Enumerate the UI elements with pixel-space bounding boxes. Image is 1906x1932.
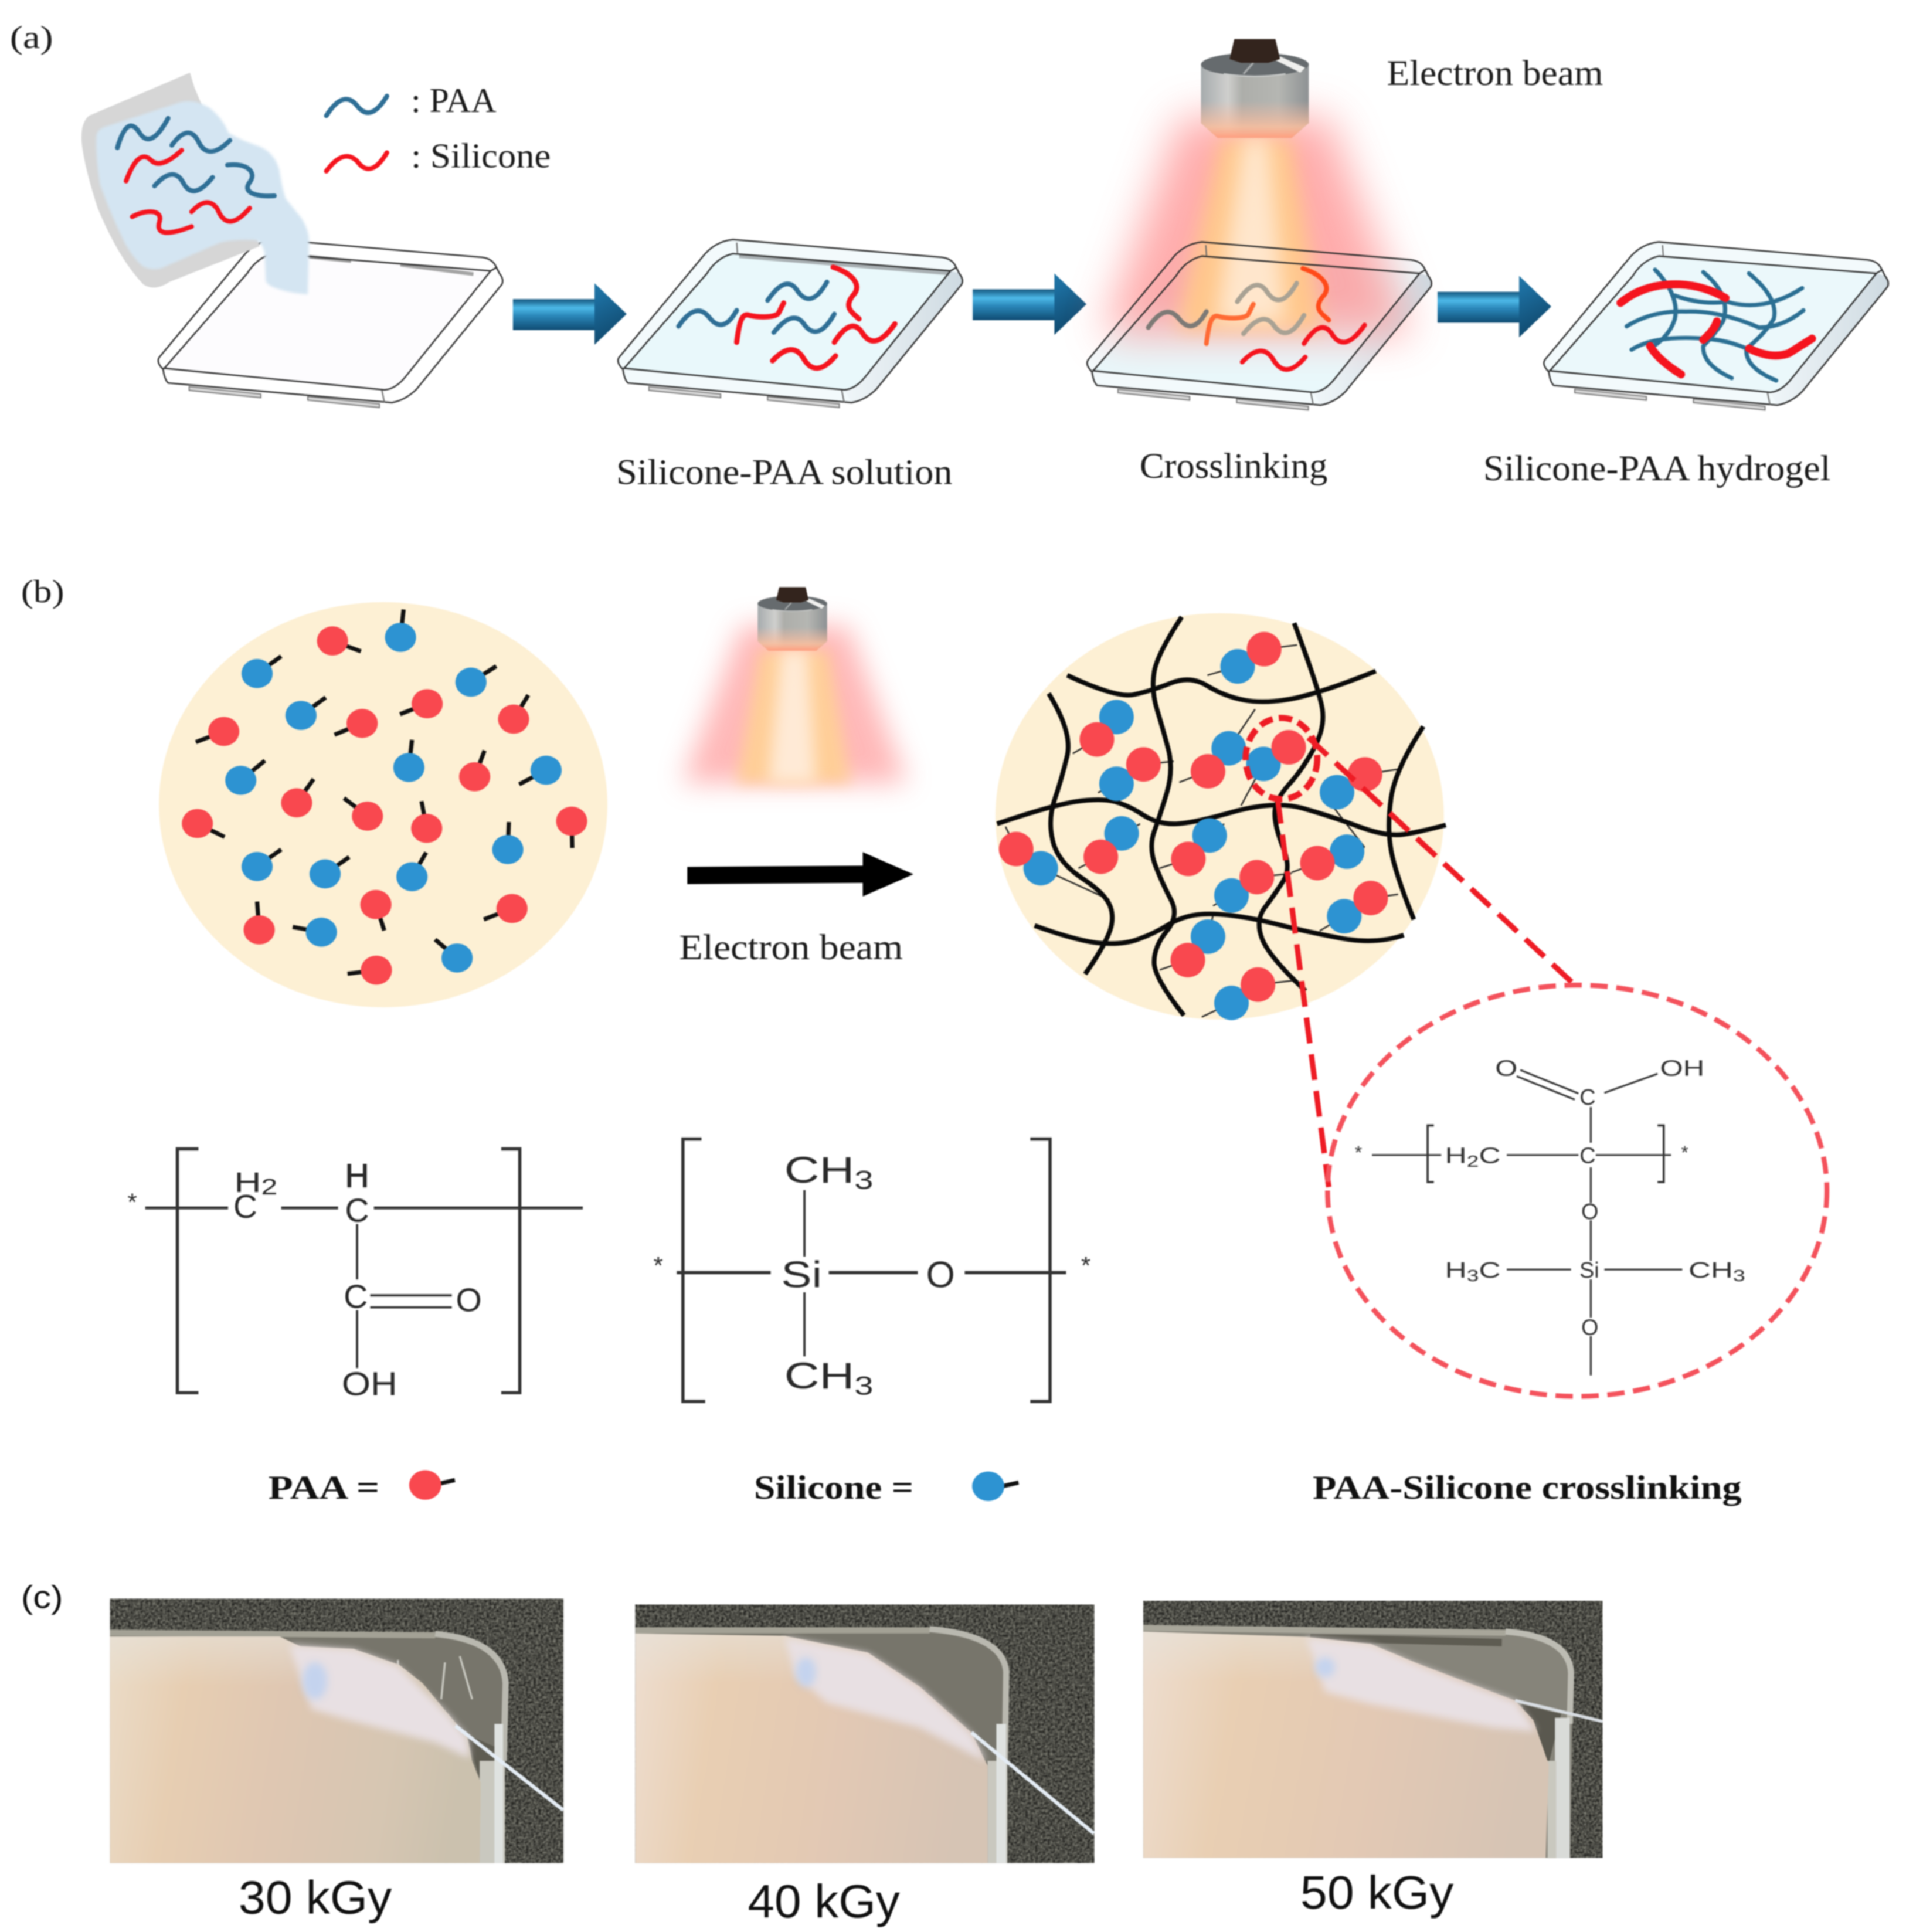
chemical structure: PAA-silicone crosslink: C [1479,1258,1500,1283]
legend: PAA and silicone chains: : Silicone [411,137,551,175]
chemical structure: silicone repeat unit [653,1139,1090,1401]
chemical structure: PAA-silicone crosslink: 2 [1467,1152,1479,1170]
callout: dashed zoom from network to crosslink structure [1246,718,1827,1396]
icon: electron beam source [1201,39,1309,138]
label: 50 kGy: 50 kGy [1300,1866,1453,1919]
panel (b): crosslinking mechanism [21,573,1827,1506]
arrow: black reaction arrow [687,852,913,897]
legend: PAA symbol [269,1469,455,1506]
arrow: solution to crosslinking [973,273,1086,335]
chemical structure: PAA-silicone crosslink: O [1495,1056,1517,1081]
dish with silicone-PAA hydrogel network [1544,242,1888,410]
panel label (b): (b) [21,573,64,609]
chemical structure: PAA-silicone crosslink: H [1445,1144,1461,1168]
arrow: crosslinking to hydrogel [1438,276,1551,337]
chemical structure: PAA-silicone crosslink: O [1581,1200,1598,1224]
crosslinking dish under electron beam [1087,117,1432,410]
label: 30 kGy: 30 kGy [239,1872,392,1923]
legend: silicone symbol: Silicone = [754,1469,913,1506]
legend: PAA and silicone chains [327,82,551,175]
legend: silicone symbol [754,1469,1018,1506]
chemical structure: silicone repeat unit: 3 [854,1166,874,1195]
pouch pouring solution [81,73,309,294]
chemical structure: PAA-silicone crosslink: 3 [1467,1267,1479,1285]
chemical structure: PAA-silicone crosslink: CH [1688,1258,1721,1283]
label: 40 kGy: 40 kGy [748,1875,900,1927]
chemical structure: PAA-silicone crosslink: H [1445,1258,1461,1283]
chemical structure: PAA repeat unit: C [345,1192,369,1229]
chemical structure: PAA repeat unit: C [344,1278,368,1315]
chemical structure: PAA repeat unit [127,1149,583,1403]
chemical structure: silicone repeat unit: 3 [854,1371,874,1400]
photo: 40 kGy hydrogel [636,1604,1094,1863]
chemical structure: PAA-silicone crosslink: * [1355,1142,1362,1163]
arrow: pour to solution [513,283,627,345]
empty dish [158,239,502,408]
caption: Silicone-PAA hydrogel: Silicone-PAA hydrogel [1483,449,1830,488]
chemical structure: silicone repeat unit: * [653,1252,663,1279]
photo: 30 kGy hydrogel [110,1599,563,1863]
chemical structure: PAA-silicone crosslink: Si [1579,1258,1599,1283]
chemical structure: PAA repeat unit: 2 [261,1175,277,1200]
chemical structure: silicone repeat unit: CH [784,1356,838,1397]
chemical structure: PAA repeat unit: C [233,1189,257,1225]
chemical structure: PAA repeat unit: OH [342,1366,397,1403]
chemical structure: PAA-silicone crosslink: C [1579,1144,1596,1168]
chemical structure: PAA repeat unit: O [456,1282,482,1319]
photo: 50 kGy hydrogel [1143,1601,1602,1858]
circle: dispersed PAA and silicone before irradiation [159,602,607,1007]
chemical structure: PAA-silicone crosslink: C [1479,1144,1500,1168]
panel (a): preparation process [10,19,1888,492]
legend: PAA symbol: PAA = [269,1469,379,1506]
legend: PAA and silicone chains: : PAA [411,82,497,120]
caption: Silicone-PAA solution: Silicone-PAA solution [616,453,952,492]
small electron beam source with glow [682,587,907,783]
chemical structure: PAA repeat unit: H [235,1167,255,1198]
panel (c): hydrogel photographs at doses [21,1579,1602,1927]
chemical structure: PAA-silicone crosslink: OH [1660,1056,1704,1081]
dish with silicone-PAA solution [618,239,963,408]
panel label (c): (c) [21,1579,63,1615]
circle: crosslinked network after irradiation [996,613,1446,1020]
panel label (a): (a) [10,19,53,55]
chemical structure: silicone repeat unit: O [926,1255,955,1296]
chemical structure: PAA repeat unit: H [345,1158,369,1194]
chemical structure: PAA repeat unit: * [127,1188,137,1215]
chemical structure: silicone repeat unit: Si [781,1255,822,1296]
chemical structure: PAA-silicone crosslink: C [1579,1085,1596,1110]
chemical structure: PAA-silicone crosslink: O [1581,1316,1598,1340]
chemical structure: PAA-silicone crosslink [1355,1056,1745,1376]
chemical structure: silicone repeat unit: CH [784,1150,838,1191]
label: Electron beam: Electron beam [679,928,903,967]
chemical structure: PAA-silicone crosslink: * [1681,1142,1688,1163]
chemical structure: PAA-silicone crosslink: 3 [1733,1267,1745,1285]
caption: Crosslinking: Crosslinking [1140,447,1327,486]
chemical structure: silicone repeat unit: * [1081,1252,1090,1279]
label: Electron beam: Electron beam [1387,54,1603,93]
caption: PAA-Silicone crosslinking: PAA-Silicone crosslinking [1313,1469,1742,1506]
